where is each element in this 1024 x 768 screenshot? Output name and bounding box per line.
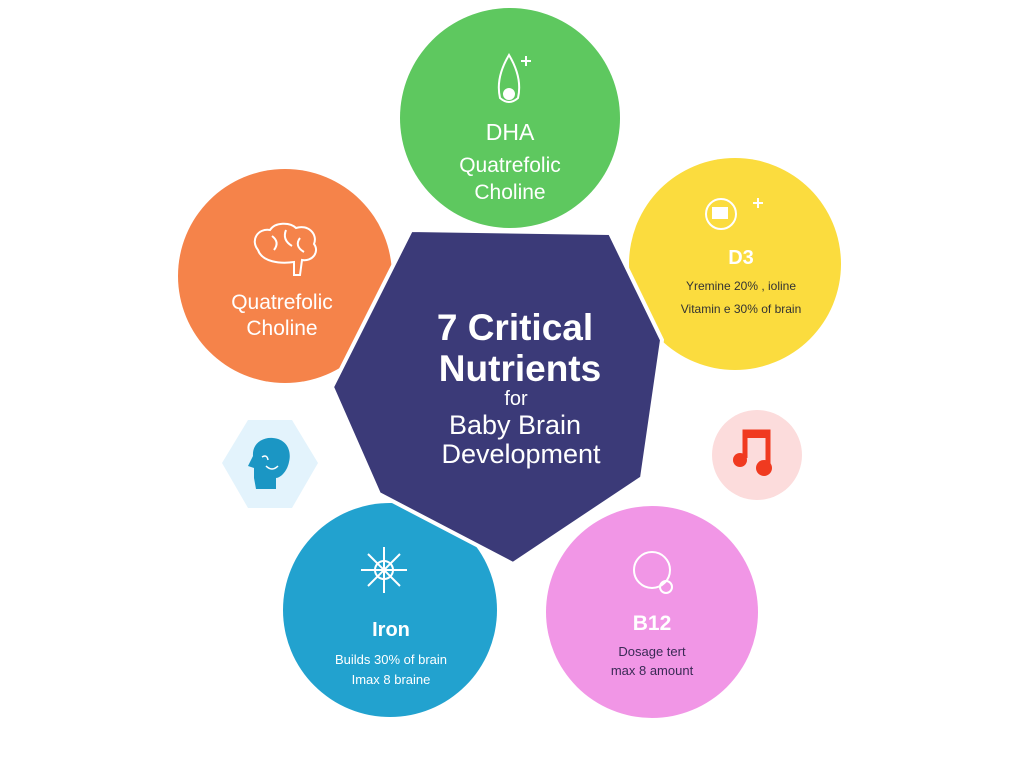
panel: yellow circle D3 [629, 158, 841, 370]
text: B12: B12 [633, 612, 671, 635]
panel: pink circle B12: Dosage tert [618, 644, 686, 659]
panel: central hexagon: for [504, 388, 528, 410]
panel: blue circle Iron: Builds 30% of brain [335, 652, 447, 667]
panel: central hexagon: Nutrients [439, 348, 601, 389]
panel: orange circle [178, 169, 392, 383]
text: Iron: Iron [372, 619, 410, 641]
panel: green circle DHA [400, 8, 620, 228]
panel: green circle DHA: Choline [474, 181, 546, 204]
panel: central hexagon: Baby Brain [449, 410, 581, 440]
panel: blue circle Iron: Imax 8 braine [352, 672, 430, 687]
panel: pink circle B12 [546, 506, 758, 718]
panel: yellow circle D3: Yremine 20% , ioline [686, 279, 796, 293]
icon: brain [255, 224, 316, 275]
title: 7 Critical [437, 307, 593, 348]
panel: yellow circle D3: Vitamin e 30% of brain [681, 302, 801, 316]
icon: head hexagon [222, 420, 318, 508]
icon: music note circle [712, 410, 802, 500]
text: Quatrefolic Choline: Quatrefolic [231, 291, 333, 314]
panel: blue circle Iron [283, 503, 497, 717]
icon: bowl [706, 198, 763, 229]
icon: snowflake [361, 547, 407, 593]
panel: pink circle B12: max 8 amount [611, 663, 694, 678]
panel: central hexagon [332, 230, 662, 564]
panel: central hexagon: Development [441, 439, 601, 469]
icon: baby face [634, 552, 672, 593]
text: DHA: DHA [486, 119, 535, 145]
panel: green circle DHA: Quatrefolic [459, 154, 561, 177]
text: D3: D3 [728, 247, 754, 269]
icon: drop [499, 55, 531, 102]
panel: orange circle: Choline [246, 317, 318, 340]
